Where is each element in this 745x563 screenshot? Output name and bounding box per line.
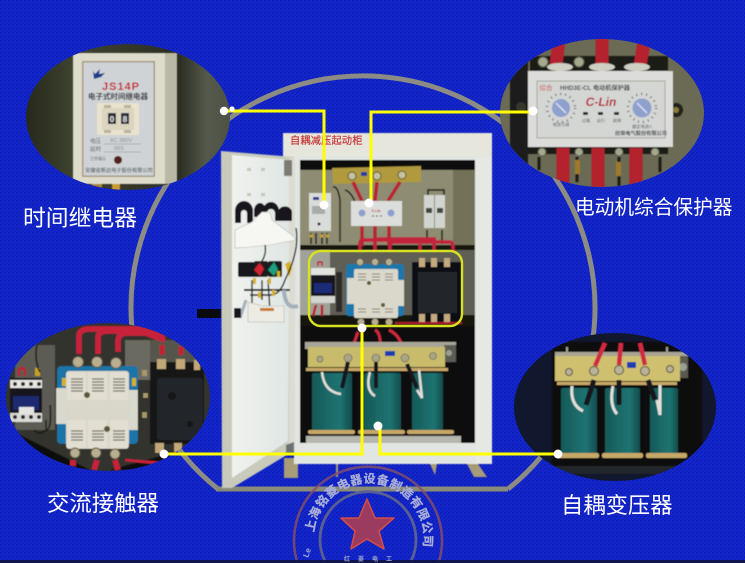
small contactor bbox=[311, 262, 335, 316]
main contactor bbox=[346, 258, 404, 326]
switch and cable on door bbox=[235, 201, 253, 223]
spec lines: 99S bbox=[114, 146, 124, 152]
cabinet body bbox=[283, 133, 492, 159]
right knob bbox=[628, 94, 656, 122]
spec lines: 延时 bbox=[90, 145, 102, 153]
red wires top bbox=[353, 182, 400, 246]
gray arc behind the cabinet bbox=[131, 76, 595, 489]
blue base bbox=[57, 366, 138, 444]
device name: 电子式时间继电器 bbox=[88, 91, 148, 101]
spec lines bbox=[85, 137, 153, 174]
black sleeves and white leads bbox=[342, 362, 417, 388]
core clamp bbox=[554, 351, 688, 357]
time relay in cabinet bbox=[309, 193, 331, 244]
transformer coils bbox=[306, 368, 461, 443]
bottom dark strip bbox=[0, 560, 745, 563]
model name: JS14P bbox=[102, 81, 140, 93]
spec lines: 电压 bbox=[90, 137, 102, 145]
sleeves and white wires bbox=[586, 380, 655, 405]
photo: motor protector: 电流可调 bbox=[553, 121, 569, 128]
red U-shaped busbars bbox=[360, 239, 453, 252]
dial switch: 0 bbox=[110, 115, 115, 124]
stamp company name: 上海铭菱电器设备制造有限公司 bbox=[304, 472, 434, 546]
photo: time relay bbox=[26, 44, 230, 190]
door wiring bbox=[244, 228, 297, 312]
red U-shaped busbars bbox=[73, 329, 170, 470]
spec lines: 工作指示 bbox=[90, 155, 106, 161]
dial switch: 8 bbox=[123, 115, 128, 124]
lower red wires bbox=[350, 323, 462, 355]
stamp star bbox=[341, 499, 394, 549]
photo: motor protector: 欣荣电气股份有限公司 bbox=[615, 129, 667, 137]
spec lines: 安徽省新远电子股份有限公司 bbox=[85, 166, 153, 174]
black bracket beside the door bbox=[197, 309, 221, 318]
contactor highlight frame bbox=[309, 251, 462, 326]
logo bbox=[93, 69, 105, 79]
stamp latin text left: Le bbox=[301, 546, 313, 559]
main contactor body bbox=[66, 371, 129, 449]
red leads bbox=[595, 343, 645, 366]
red cables bbox=[556, 30, 646, 190]
protector label: 综合 bbox=[540, 83, 553, 92]
cabinet feet bbox=[284, 458, 487, 478]
status LEDs bbox=[583, 112, 619, 115]
stamp brand name: 红菱电工 bbox=[344, 555, 400, 563]
cabinet title: 自耦减压起动柜 bbox=[290, 134, 363, 147]
photo: motor protector: 过载 bbox=[582, 117, 591, 124]
label: autotransformer: 自耦变压器 bbox=[561, 493, 672, 518]
indicator lamp bbox=[114, 156, 122, 164]
photo: motor protector: HHD3E-CL 电动机保护器 bbox=[560, 84, 631, 92]
spec lines: AC 380V bbox=[110, 138, 132, 144]
terminal screws bbox=[538, 57, 659, 156]
motor protector in cabinet bbox=[351, 201, 402, 226]
label: AC contactor: 交流接触器 bbox=[47, 491, 159, 516]
small contactor bbox=[10, 368, 42, 422]
leader line: autotransformer bbox=[374, 422, 562, 458]
control cabinet bbox=[221, 133, 492, 488]
buttons bbox=[238, 261, 292, 277]
label: time relay: 时间继电器 bbox=[23, 205, 137, 231]
insulating collars bbox=[547, 63, 650, 71]
reactor contactor bbox=[412, 258, 462, 323]
reactor contactor bbox=[142, 345, 204, 453]
dial switch bbox=[97, 103, 139, 135]
coils bbox=[561, 388, 597, 454]
photo: motor protector: 故障 bbox=[613, 117, 621, 124]
transformer core clamp bbox=[305, 342, 456, 367]
leader line: motor protector bbox=[364, 106, 538, 208]
label: motor protector: 电动机综合保护器 bbox=[575, 197, 733, 219]
stamp bbox=[0, 428, 745, 563]
left knob bbox=[547, 94, 575, 122]
photo: motor protector: 运行 bbox=[597, 117, 605, 124]
motor protector in cabinet: C-Lin bbox=[372, 209, 380, 213]
photo: autotransformer bbox=[510, 330, 722, 485]
leader line: AC contactor bbox=[160, 324, 366, 458]
leader line: time relay bbox=[220, 106, 328, 210]
cabinet interior bbox=[300, 160, 475, 443]
photo: motor protector: 额定电流A bbox=[632, 123, 652, 130]
photo: AC contactor bbox=[6, 323, 210, 471]
terminals on bar bbox=[566, 366, 674, 376]
copper busbar bbox=[332, 166, 421, 184]
open door bbox=[221, 151, 298, 488]
C-Lin logo: C-Lin bbox=[586, 95, 616, 109]
copper terminals bbox=[70, 356, 122, 459]
photo: motor protector bbox=[500, 39, 704, 187]
fuse holders bbox=[424, 190, 445, 244]
